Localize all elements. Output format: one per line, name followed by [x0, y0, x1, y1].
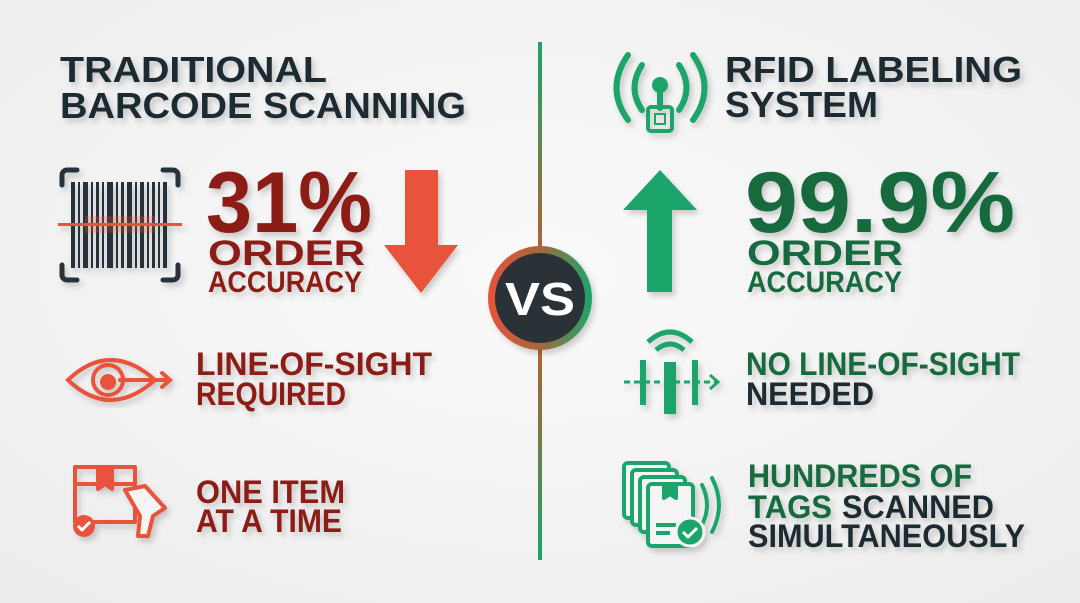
icon: no line of sight	[624, 332, 718, 414]
text: hundreds of tags: SIMULTANEOUSLY	[748, 518, 1025, 554]
stat left: ACCURACY	[208, 266, 362, 299]
text: hundreds of tags: HUNDREDS OF	[748, 458, 972, 494]
arrow up	[623, 170, 697, 292]
text: one item: AT A TIME	[196, 503, 342, 539]
text: no line of sight: NO LINE-OF-SIGHT	[746, 346, 1020, 382]
icon: eye	[68, 360, 170, 400]
icon: box and scanner	[73, 467, 165, 537]
text: line of sight: REQUIRED	[196, 376, 346, 412]
vs badge: VS	[505, 273, 575, 325]
stat left: 31%	[206, 155, 372, 251]
stat left: ORDER	[208, 234, 365, 273]
text: line of sight: LINE-OF-SIGHT	[196, 346, 432, 382]
stat left	[206, 155, 372, 299]
stat right: ORDER	[747, 234, 903, 273]
text: one item	[196, 474, 345, 539]
title right: SYSTEM	[725, 84, 878, 125]
text: hundreds of tags: TAGS	[748, 489, 832, 525]
title left	[60, 49, 466, 126]
text: no line of sight	[746, 346, 1020, 412]
stat right: ACCURACY	[747, 266, 902, 299]
stat right: 99.9%	[745, 155, 1015, 251]
title left: BARCODE SCANNING	[60, 85, 466, 126]
title left: TRADITIONAL	[60, 49, 327, 90]
text: one item: ONE ITEM	[196, 474, 345, 510]
stat right	[745, 155, 1015, 299]
text: hundreds of tags: SCANNED	[842, 489, 994, 525]
icon: multiple tags	[624, 463, 719, 546]
icon: barcode	[58, 170, 182, 280]
title right: RFID LABELING	[725, 49, 1022, 90]
text: no line of sight: NEEDED	[746, 376, 874, 412]
vs badge	[488, 246, 592, 350]
divider line	[538, 42, 542, 560]
arrow down	[384, 170, 458, 293]
text: hundreds of tags	[748, 458, 1025, 554]
title right	[725, 49, 1022, 125]
icon: rfid	[616, 55, 704, 131]
text: line of sight	[196, 346, 432, 412]
